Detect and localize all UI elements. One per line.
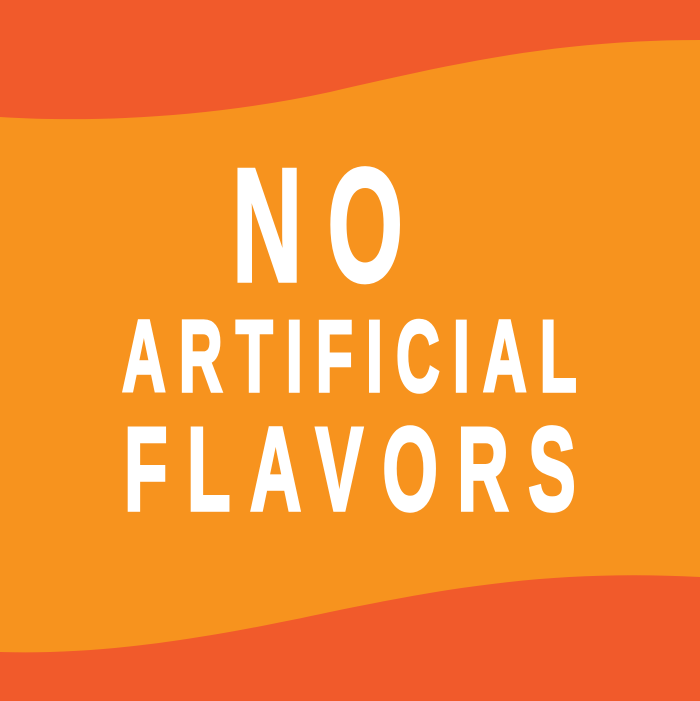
bottom wave — [0, 575, 700, 701]
top wave — [0, 0, 700, 119]
word: ARTIFICIAL: ARTIFICIAL — [122, 300, 577, 413]
word: NO: NO — [232, 135, 403, 316]
headline text — [122, 135, 577, 535]
word: FLAVORS: FLAVORS — [124, 402, 576, 535]
